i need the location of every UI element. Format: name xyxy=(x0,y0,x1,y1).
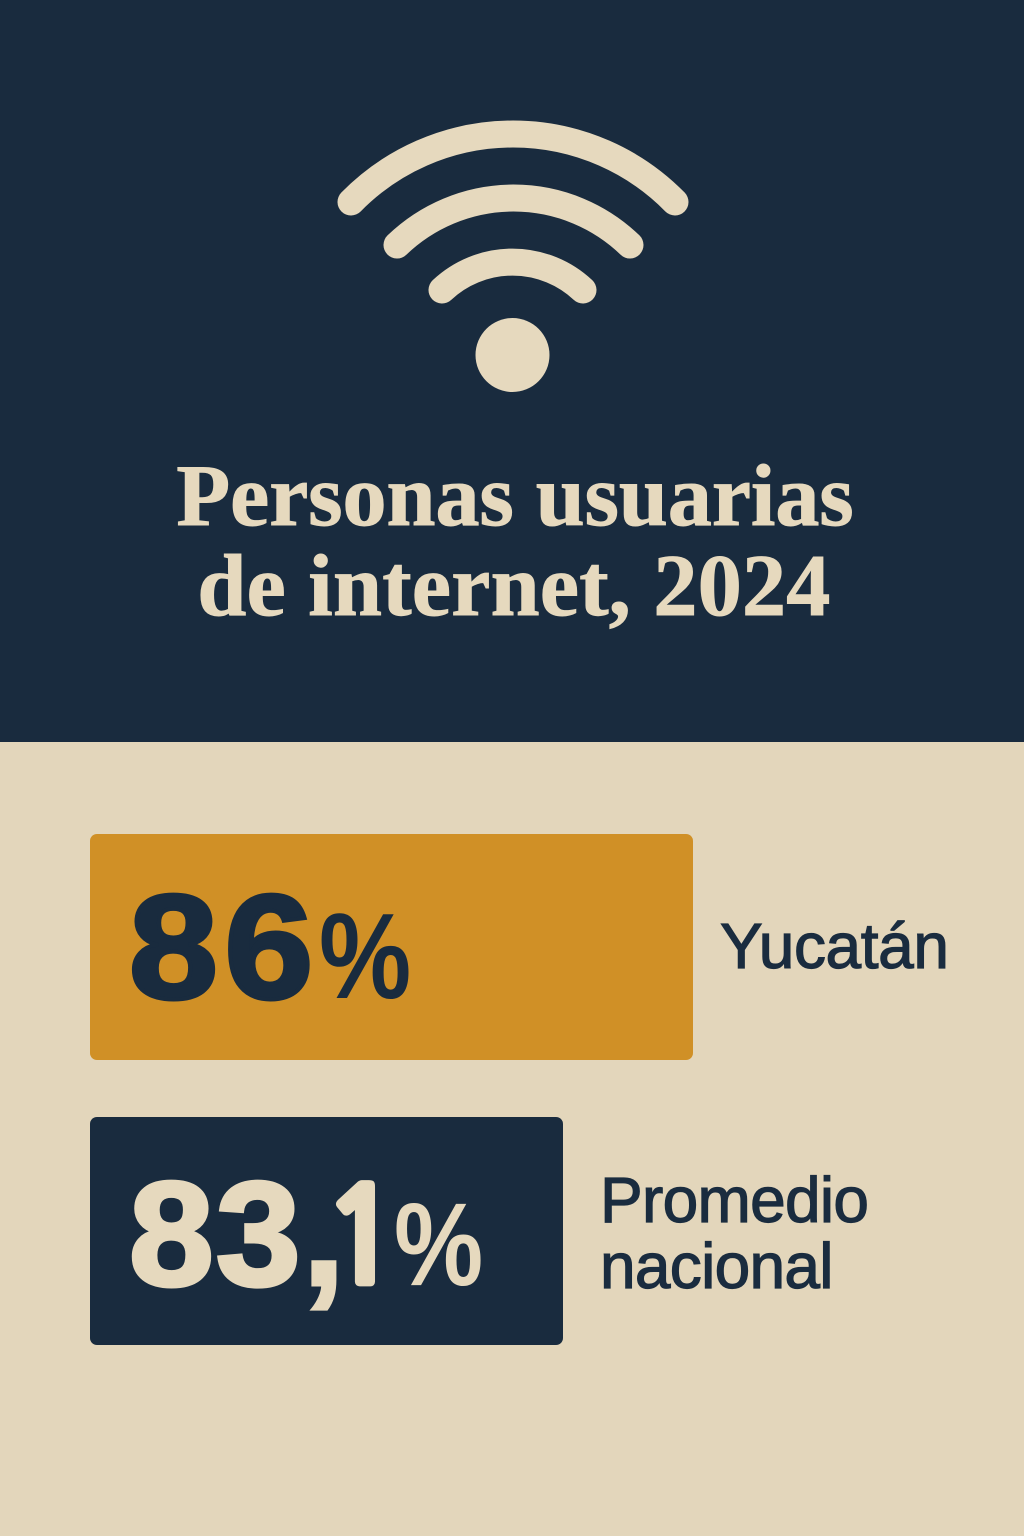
label: Yucatán: Yucatán xyxy=(720,910,949,982)
title: de internet, 2024 xyxy=(197,538,831,635)
title: Personas usuarias xyxy=(176,448,854,545)
label: Promedio nacional: Promedio xyxy=(600,1164,868,1236)
label: Promedio nacional: nacional xyxy=(600,1230,833,1302)
bar: Promedio nacional xyxy=(90,1117,563,1345)
percent sign: % xyxy=(319,888,411,1024)
value: 86: 86 xyxy=(129,865,320,1030)
icon: wifi signal xyxy=(338,120,688,392)
label: Promedio nacional xyxy=(600,1164,868,1302)
title xyxy=(176,448,854,635)
percent sign: % xyxy=(394,1179,483,1311)
value: 83: 83 xyxy=(129,1152,303,1317)
decimal digit 1: 1 xyxy=(322,1172,402,1303)
decimal comma: , xyxy=(302,1145,345,1319)
header panel xyxy=(0,0,1024,742)
lower panel: comparison bars xyxy=(0,742,1024,1536)
bar: Yucatán xyxy=(90,834,693,1060)
